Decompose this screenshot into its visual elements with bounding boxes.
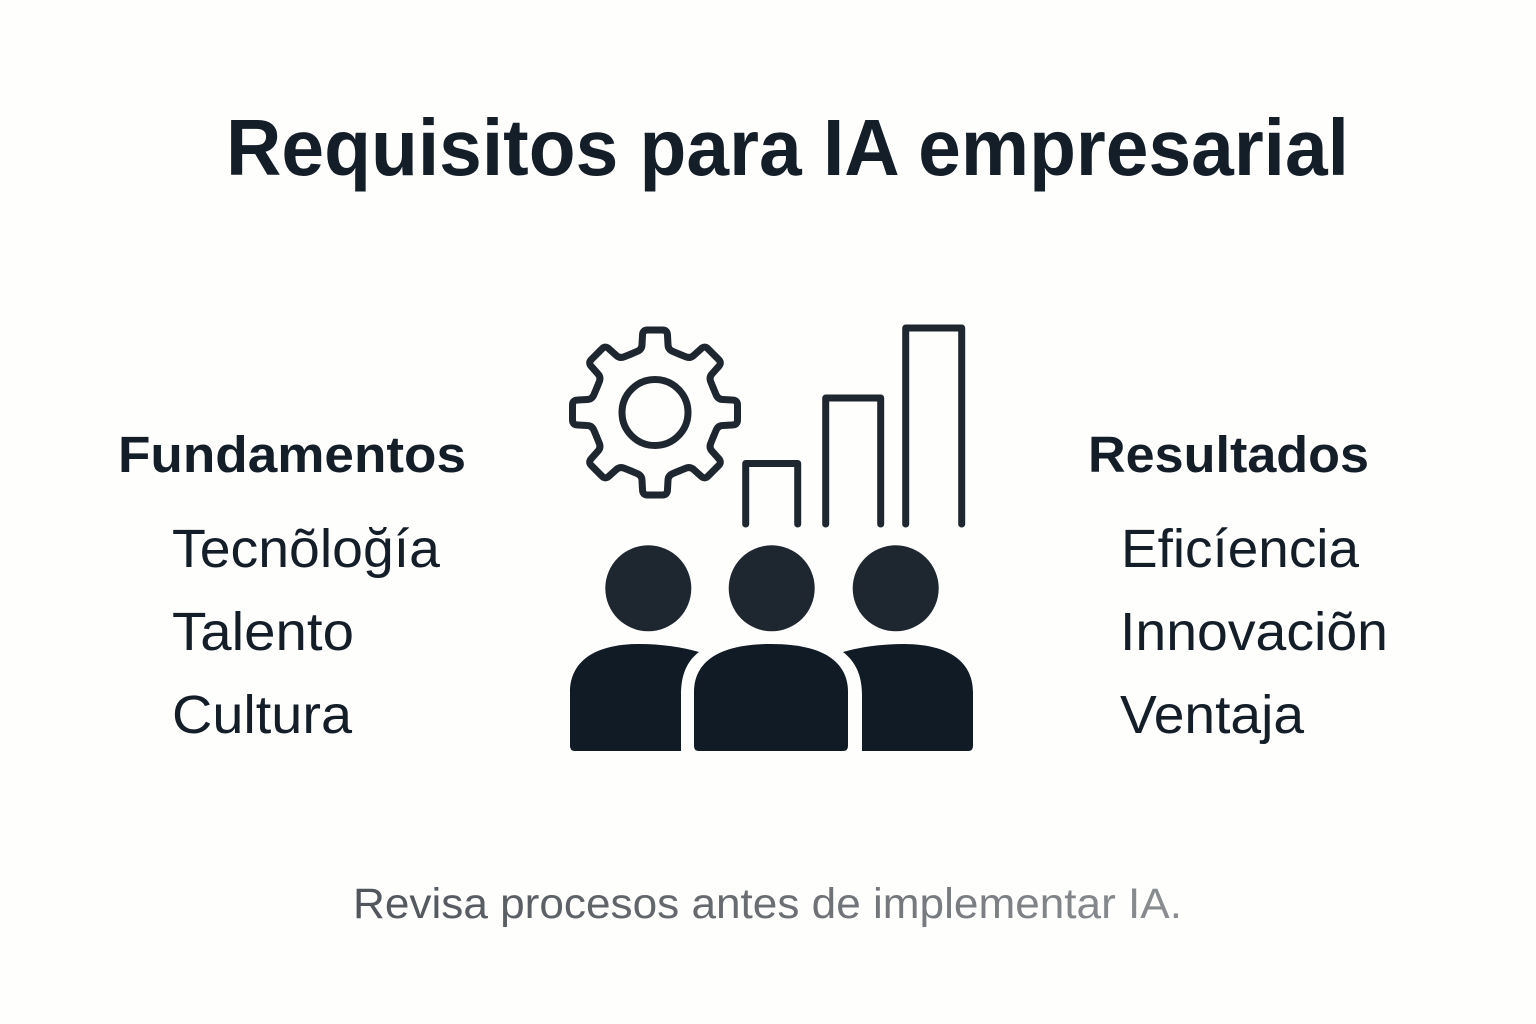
- icon: bar chart: [746, 328, 962, 524]
- item: eficiencia: Eficíencia: [1121, 519, 1360, 579]
- central icon group: [570, 328, 973, 751]
- heading: fundamentos: Fundamentos: [118, 426, 466, 483]
- item: tecnología: Tecnõloğía: [172, 519, 441, 579]
- heading: resultados: Resultados: [1088, 426, 1369, 483]
- icon: people: [570, 545, 973, 751]
- title: Requisitos para IA empresarial: [226, 103, 1349, 192]
- item: talento: Talento: [172, 602, 354, 662]
- icon: gear: [572, 330, 738, 495]
- panel: resultados: [1088, 426, 1388, 745]
- item: innovación: Innovaciõn: [1120, 602, 1388, 662]
- panel: fundamentos: [118, 426, 466, 745]
- item: ventaja: Ventaja: [1120, 685, 1305, 745]
- item: cultura: Cultura: [172, 685, 353, 745]
- footer note: Revisa procesos antes de implementar IA.: [353, 880, 1182, 928]
